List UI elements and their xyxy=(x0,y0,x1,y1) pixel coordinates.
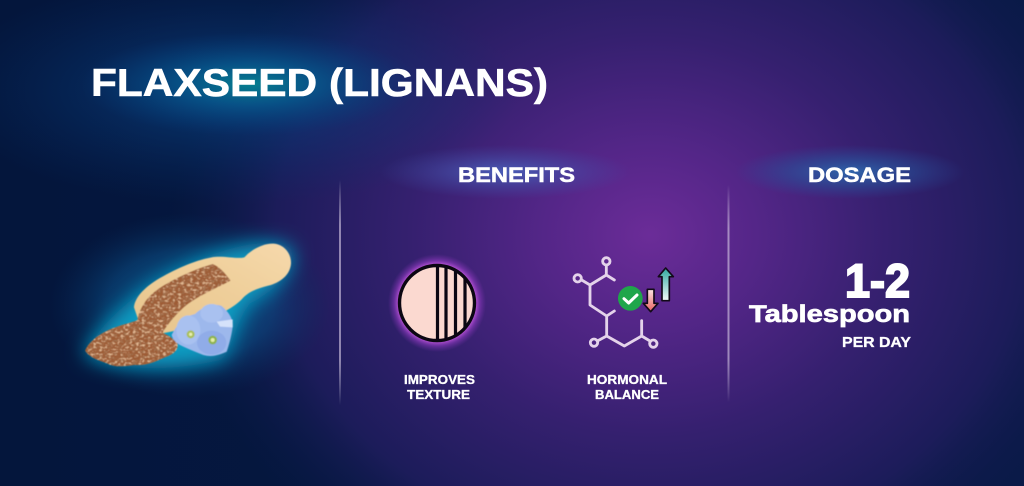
arrow down xyxy=(643,289,658,312)
seed pile and scoop seeds xyxy=(85,264,231,366)
icon: hormonal balance molecule xyxy=(574,258,673,347)
label: improves texture xyxy=(404,373,475,402)
molecule bonds xyxy=(574,258,657,347)
heading glow xyxy=(735,145,965,199)
dosage amount: 1-2 xyxy=(845,254,910,307)
panel: benefits xyxy=(380,145,673,402)
dosage frequency: PER DAY xyxy=(842,335,911,351)
flax flowers xyxy=(172,304,233,356)
label: improves texture: IMPROVES xyxy=(404,373,475,387)
label: hormonal balance: HORMONAL xyxy=(587,373,667,387)
heading: dosage: DOSAGE xyxy=(808,164,911,187)
dosage unit: Tablespoon xyxy=(749,301,910,328)
arrow up xyxy=(658,268,673,301)
scoop body xyxy=(134,244,291,333)
title: FLAXSEED (LIGNANS) xyxy=(91,62,548,105)
divider xyxy=(339,180,341,405)
icon: improves texture xyxy=(388,254,486,352)
label: improves texture: TEXTURE xyxy=(407,388,470,402)
panel: flaxseed image xyxy=(50,213,330,397)
icon: wooden scoop with seeds and flowers xyxy=(85,244,291,366)
label: hormonal balance xyxy=(587,373,667,402)
divider xyxy=(728,185,730,402)
panel: dosage xyxy=(735,145,965,351)
heading glow xyxy=(380,145,630,199)
check badge xyxy=(618,286,643,311)
scoop glow xyxy=(50,213,330,397)
heading: benefits: BENEFITS xyxy=(458,164,575,187)
label: hormonal balance: BALANCE xyxy=(595,388,659,402)
